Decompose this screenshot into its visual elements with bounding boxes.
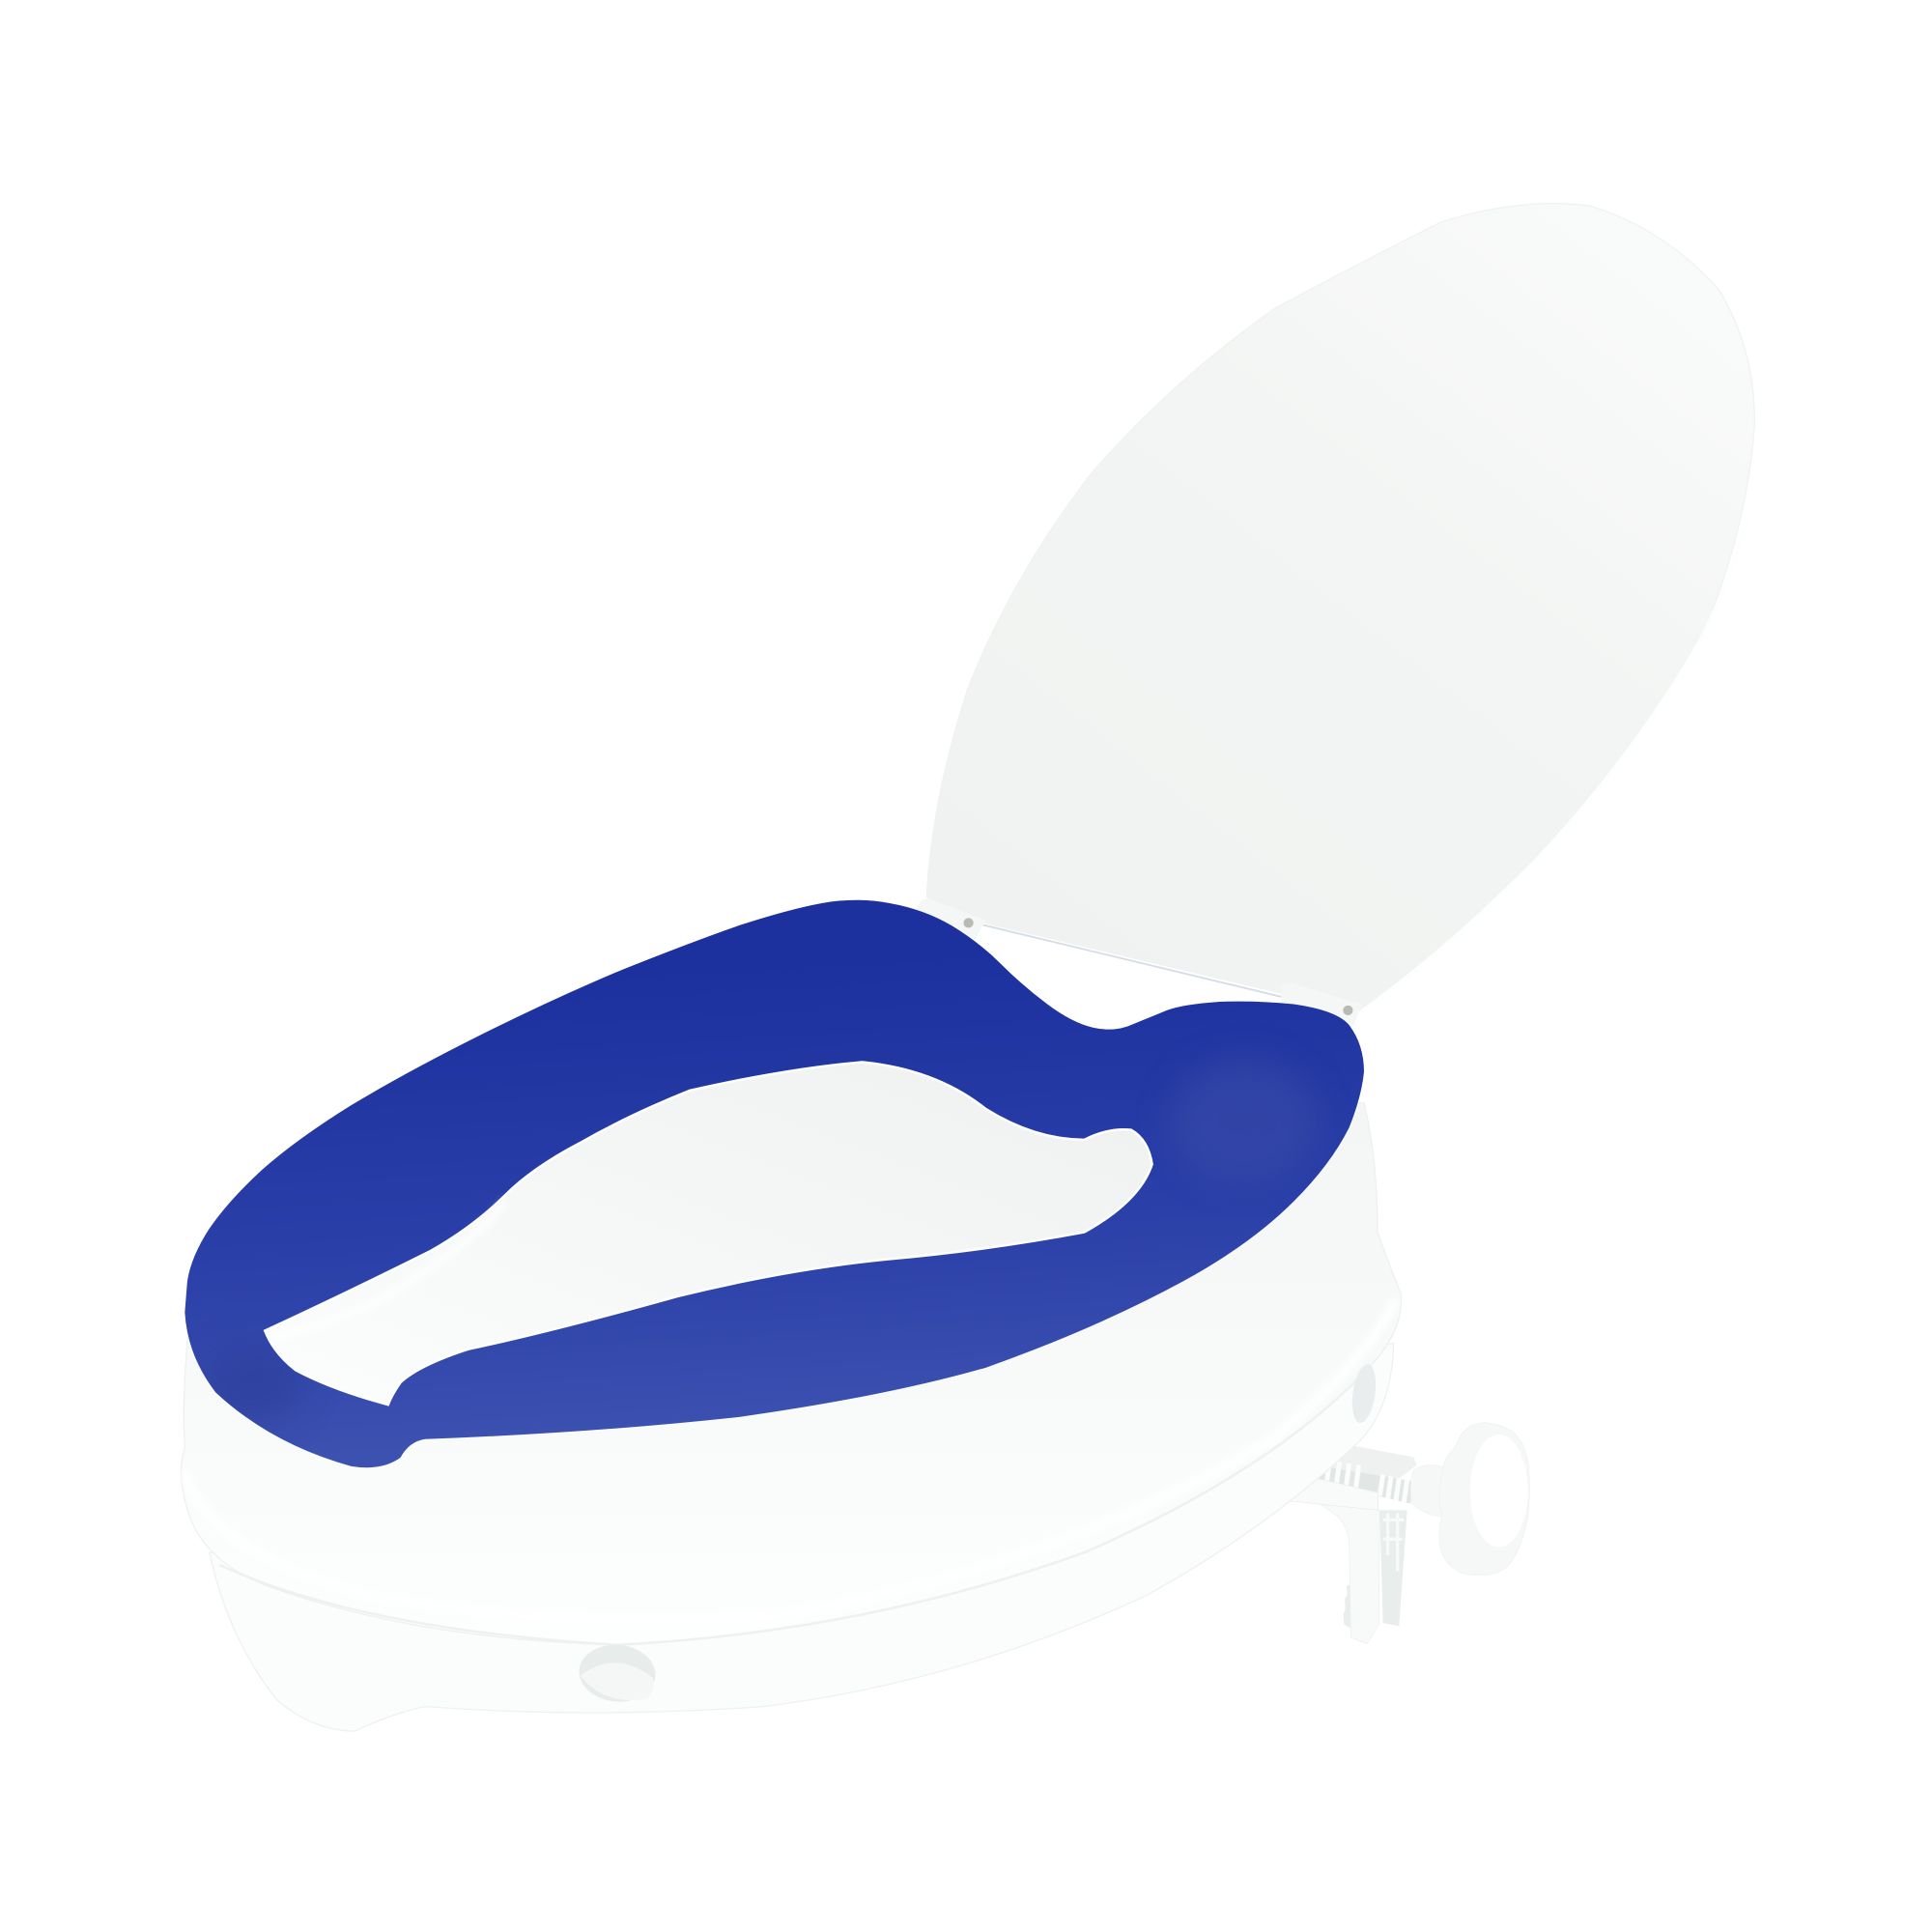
rim highlight: [185, 1300, 1396, 1620]
front fixing hole: [577, 1641, 658, 1705]
lower base: [210, 1343, 1394, 1731]
clamp leg teeth: [1344, 1584, 1352, 1630]
lid front edge: [980, 924, 1282, 997]
hinge left: [914, 899, 985, 943]
product illustration: raised toilet seat: [181, 203, 1755, 1731]
knob stem: [1410, 1464, 1444, 1517]
knob: [1439, 1423, 1529, 1576]
blue seat cushion: [185, 900, 1364, 1467]
clamp and adjustment knob: [1280, 1423, 1529, 1644]
hinge right: [1282, 983, 1361, 1028]
threaded screw: [1292, 1456, 1413, 1504]
clamp bracket top: [1280, 1439, 1417, 1494]
upper body: [181, 1103, 1402, 1645]
rim lower edge: [219, 1369, 1368, 1645]
clamp leg front: [1321, 1504, 1379, 1644]
toilet lid: [914, 204, 1754, 1028]
seat opening: [265, 1062, 1152, 1405]
side fixing hole: [1349, 1363, 1379, 1425]
clamp leg side: [1379, 1510, 1407, 1626]
seat body: [181, 1103, 1402, 1731]
cushion shading: [203, 1060, 1319, 1423]
clamp bracket front: [1280, 1470, 1378, 1510]
